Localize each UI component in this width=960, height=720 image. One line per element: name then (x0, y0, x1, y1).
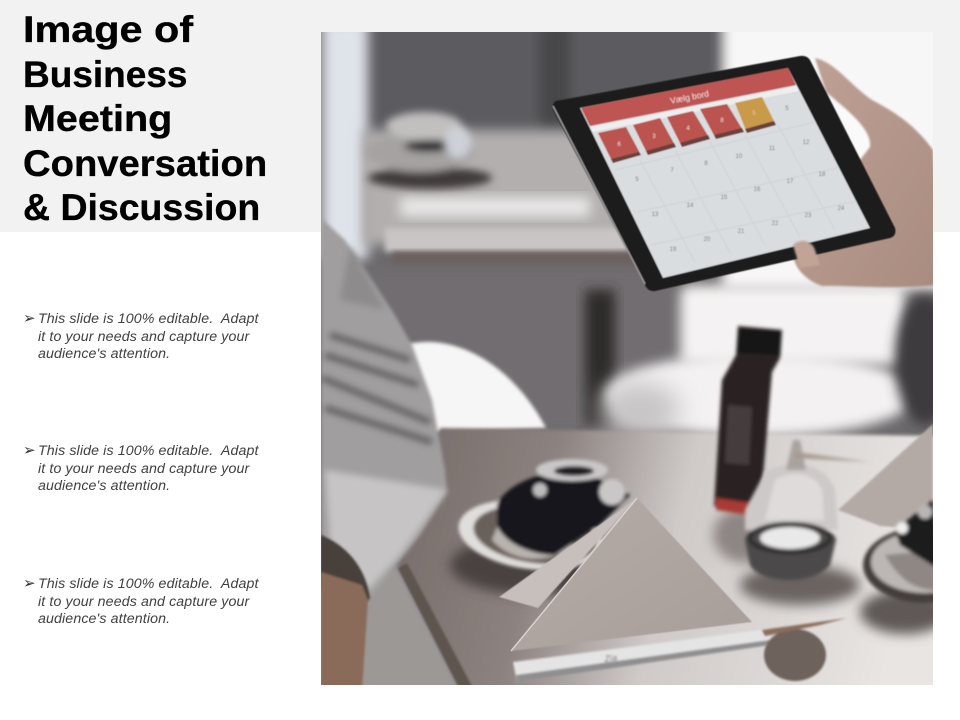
photo: business meeting with tablet (321, 32, 933, 685)
table numbers on screen: 23 (805, 213, 812, 219)
table numbers on screen: 5 (635, 177, 639, 183)
orange tile (735, 97, 776, 133)
table numbers on screen: 21 (738, 229, 745, 235)
tile numbers (617, 111, 756, 148)
table numbers on screen (635, 106, 845, 253)
wrist with watch and hand (321, 535, 370, 690)
table numbers on screen: 20 (704, 237, 711, 243)
header divider (590, 86, 799, 132)
text block 2: audience's attention. (38, 478, 170, 494)
table numbers on screen: 24 (838, 206, 845, 212)
text block 2: it to your needs and capture your (38, 460, 249, 476)
tablet body (553, 56, 895, 291)
screen header (581, 68, 796, 126)
header band (0, 0, 960, 232)
right cup (860, 498, 933, 604)
table numbers on screen: 15 (721, 195, 728, 201)
red tile 1 (598, 127, 641, 163)
text block 1: This slide is 100% editable. Adapt (38, 311, 259, 327)
tile footers (611, 121, 776, 163)
title (23, 9, 267, 228)
shadow right (740, 565, 860, 605)
screen grid (642, 130, 824, 238)
napkin back flap (499, 498, 637, 608)
header label: Vælg bord (669, 88, 710, 106)
text block 2 (23, 441, 259, 494)
text block 3: This slide is 100% editable. Adapt (38, 576, 259, 592)
table numbers on screen: 7 (670, 168, 674, 174)
background scene (321, 10, 955, 685)
text block 1: audience's attention. (38, 346, 170, 362)
under-table floor (321, 565, 462, 690)
gap between fingers (826, 92, 870, 160)
glass jar (745, 440, 870, 580)
red tile 2 (633, 118, 676, 155)
right napkin (838, 424, 933, 530)
title: Image of (23, 9, 193, 50)
table numbers on screen: 18 (819, 172, 826, 178)
tile numbers: 3 (652, 134, 656, 140)
text block 1 (23, 309, 259, 362)
title: Business (23, 54, 188, 94)
table numbers on screen: 17 (787, 179, 794, 185)
napkin front (511, 498, 752, 651)
pen (513, 629, 772, 682)
text block 3: it to your needs and capture your (38, 594, 249, 610)
cup shadow (445, 542, 584, 602)
text block 2: This slide is 100% editable. Adapt (38, 443, 259, 459)
text block 2: ➢ (23, 441, 36, 459)
tablet screen (580, 68, 870, 278)
table numbers on screen: 8 (704, 161, 708, 167)
table numbers on screen: 19 (670, 247, 677, 253)
stone and paper (762, 618, 847, 681)
tablet (553, 56, 895, 291)
table numbers on screen: 12 (803, 140, 810, 146)
red tile 4 (700, 104, 744, 139)
title: Meeting (23, 98, 172, 139)
tile numbers: 8 (720, 118, 724, 124)
saucer and dark cup (454, 459, 630, 579)
hand holding tablet (793, 58, 940, 287)
table numbers on screen: 13 (652, 212, 659, 218)
table numbers on screen: 22 (772, 221, 779, 227)
title: & Discussion (23, 187, 260, 228)
text block 1: it to your needs and capture your (38, 328, 249, 344)
table numbers on screen: 16 (754, 187, 761, 193)
title: Conversation (23, 142, 267, 184)
sleeve arm (321, 218, 447, 598)
thumb (793, 241, 820, 268)
bottle (714, 326, 782, 516)
text block 3: ➢ (23, 574, 36, 592)
table numbers on screen: 10 (736, 154, 743, 160)
red tile 3 (667, 111, 710, 147)
blurred cup on far table (366, 112, 492, 189)
table (400, 428, 940, 690)
table numbers on screen: 5 (785, 106, 789, 112)
table numbers on screen: 14 (687, 203, 694, 209)
text block 3 (23, 574, 259, 627)
text block 3: audience's attention. (38, 611, 170, 627)
table numbers on screen: 11 (769, 146, 776, 152)
tile numbers: 5 (752, 111, 756, 117)
table wood edge (398, 563, 474, 690)
text block 1: ➢ (23, 309, 36, 327)
tile numbers: 6 (617, 142, 621, 148)
pen: Zia (603, 653, 618, 664)
white chair (405, 342, 546, 432)
tile numbers: 4 (686, 126, 690, 132)
shadow under bottle (706, 510, 754, 570)
